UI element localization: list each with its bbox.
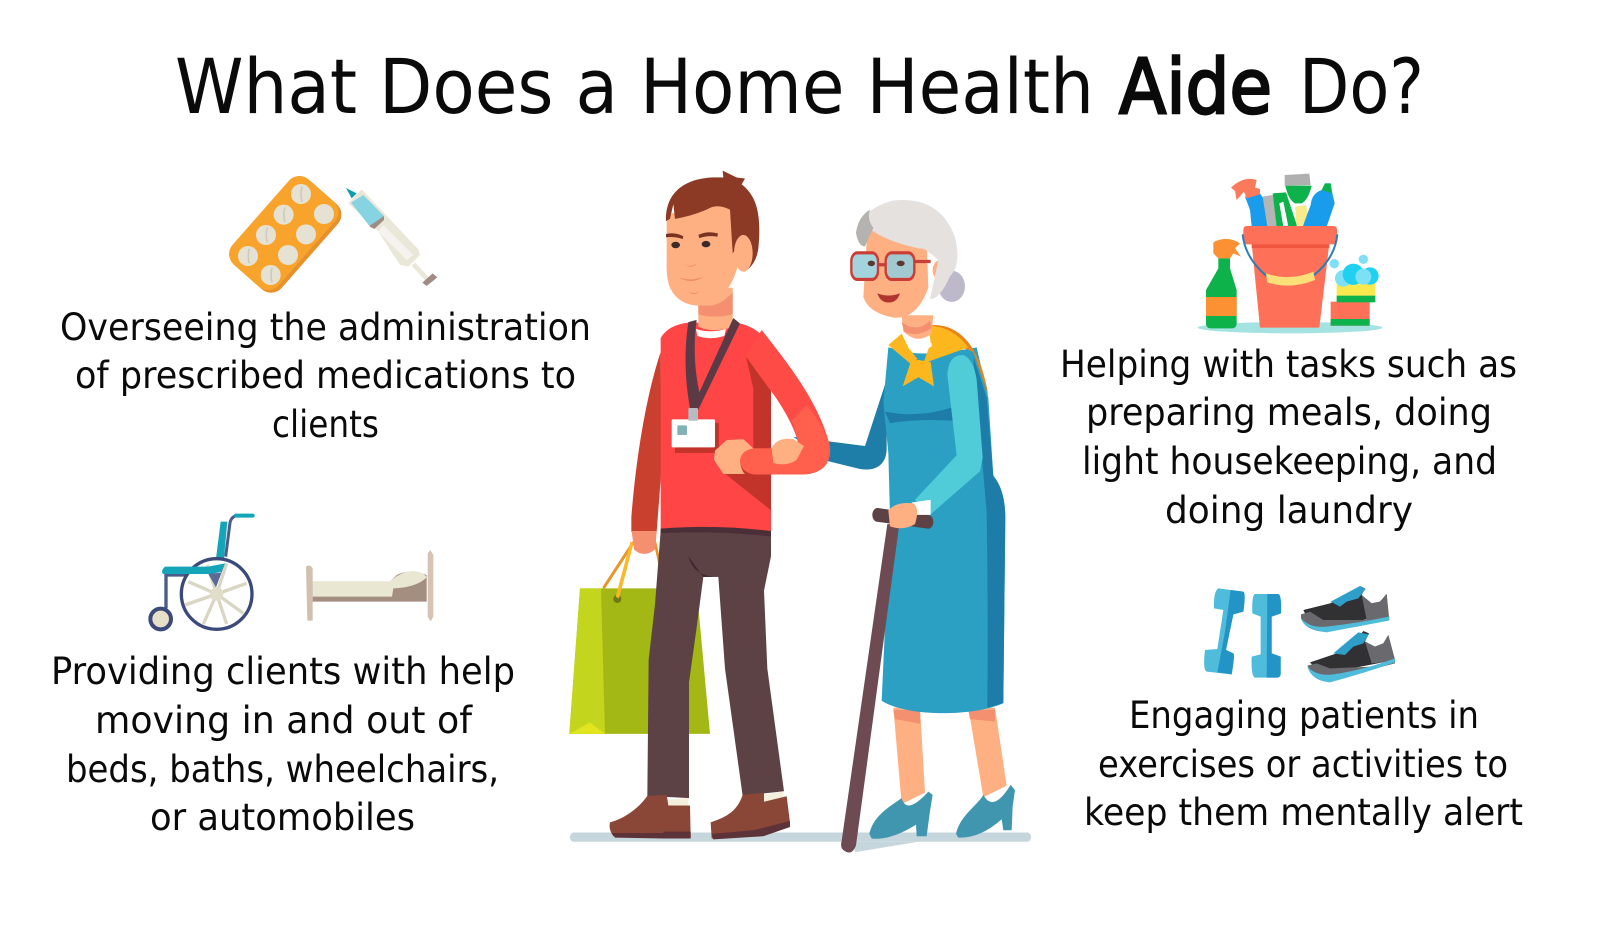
text: housekeeping: Helping with tasks such as (1060, 343, 1517, 386)
text: medications (60, 306, 591, 446)
icon: dumbbells and sneakers (1204, 586, 1395, 682)
illustration: home health aide walking with elderly woman (569, 171, 1031, 853)
aide: bent arm with woman's hand (714, 330, 830, 475)
icon: cleaning supplies bucket (1198, 174, 1382, 333)
aide: trousers (647, 531, 784, 798)
aide: left sleeve and hand (631, 352, 662, 554)
aide: head and hair (666, 171, 759, 330)
text: medications: clients (272, 403, 379, 446)
woman: scarf (888, 325, 988, 396)
aide: torso (661, 323, 771, 536)
title: Do? (1299, 42, 1424, 131)
text: medications: of prescribed medications to (75, 354, 576, 397)
text: housekeeping: preparing meals, doing (1086, 391, 1492, 434)
text: exercises: keep them mentally alert (1084, 791, 1523, 834)
icon: medication blister pack and syringe (223, 170, 437, 298)
woman: sleeve and arm (915, 355, 983, 515)
ground shadow (570, 833, 1031, 852)
woman: hand on cane (888, 500, 931, 528)
text: exercises (1084, 694, 1523, 834)
title: Aide (1119, 42, 1272, 131)
aide: collar, lanyard and ID badge (672, 318, 740, 453)
text: exercises: exercises or activities to (1098, 743, 1508, 786)
icon: wheelchair and bed (150, 516, 433, 629)
text: housekeeping: light housekeeping, and (1082, 440, 1497, 483)
cane (841, 515, 928, 853)
text: mobility help: beds, baths, wheelchairs, (66, 748, 499, 791)
text: mobility help: or automobiles (150, 796, 415, 839)
text: mobility help (51, 650, 515, 839)
woman: head and hair (851, 200, 965, 339)
aide: shoes (610, 791, 790, 839)
woman: dress (882, 347, 1005, 713)
text: exercises: Engaging patients in (1129, 694, 1479, 737)
text: medications: Overseeing the administration (60, 306, 591, 349)
shopping bag (569, 542, 710, 734)
text: mobility help: moving in and out of (95, 699, 473, 742)
text: housekeeping (1060, 343, 1517, 532)
title: What Does a Home Health (175, 42, 1094, 131)
text: mobility help: Providing clients with help (51, 650, 515, 693)
woman: legs, shoes and back arm (793, 380, 1015, 839)
text: housekeeping: doing laundry (1165, 489, 1413, 532)
